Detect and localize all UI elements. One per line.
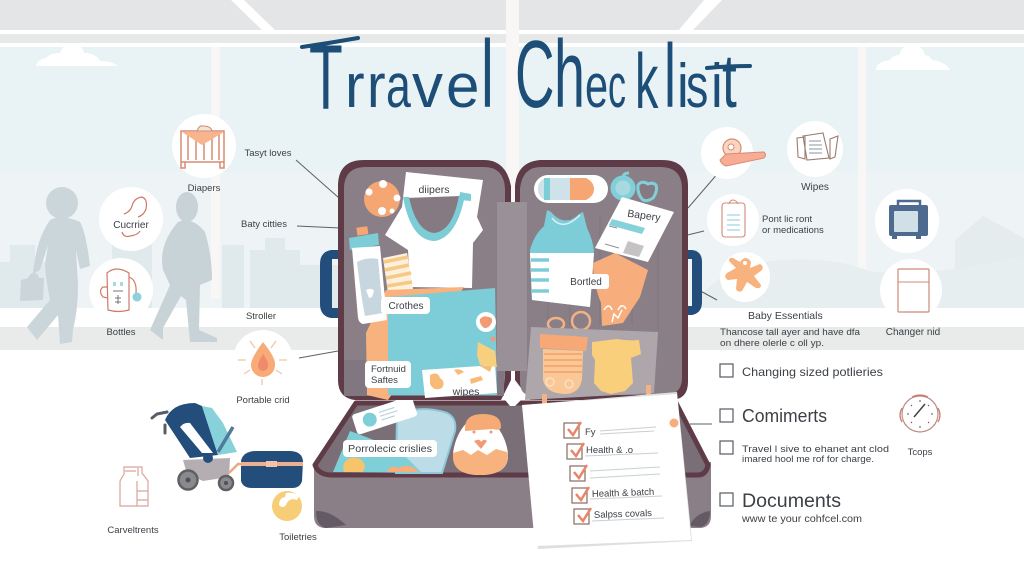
label: Pont licront or medications: or medications (762, 225, 824, 236)
label: Bapery: Bapery (627, 208, 662, 224)
label: Pont licront or medications (762, 214, 824, 236)
label: Toiletries: Toiletries (279, 532, 317, 543)
title: i (711, 52, 723, 120)
icon: clipboard (707, 194, 759, 246)
title: c (608, 52, 626, 120)
icon: roll (701, 127, 766, 179)
checklist: Documents: www te your cohfcel.com (741, 514, 862, 525)
ball (364, 180, 400, 217)
egg toy (453, 414, 508, 475)
label: Fortnuid Saftes (365, 361, 411, 388)
label: Tasyt loves: Tasyt loves (244, 148, 292, 159)
teal tank top (530, 210, 594, 307)
checklist: Comimerts: Comimerts (742, 406, 827, 426)
text: baby essentials description (720, 327, 860, 348)
checklist paper (522, 392, 692, 549)
label: Wipes: Wipes (801, 182, 829, 193)
check item: Health & batch (572, 487, 662, 503)
title: h (554, 21, 585, 128)
title: e (585, 52, 608, 120)
title: r (345, 52, 365, 120)
title: t (722, 39, 737, 124)
clips (542, 385, 651, 408)
label: Fortnuid Saftes: Fortnuid (371, 364, 406, 375)
check item: Salpss covals (574, 508, 664, 524)
icon: cabinet (880, 259, 942, 321)
orange bib (593, 253, 648, 326)
label: Tcops: Tcops (908, 447, 933, 458)
orange cloth (366, 287, 464, 400)
label: Bortled (565, 274, 609, 289)
icon: portable crib drop (233, 330, 293, 390)
checklist: Changing sized potlieries: Changing sized potlieries (742, 365, 883, 379)
icon: navy device (875, 189, 939, 253)
check item: Salpss covals: Salpss covals (594, 508, 652, 521)
label: Stroller: Stroller (246, 311, 276, 322)
label: Crothes: Crothes (388, 301, 424, 312)
label: Carveltrents: Carveltrents (107, 525, 159, 536)
suitcase: lower shell (314, 396, 711, 528)
icon: crib (172, 114, 236, 178)
yellow onesie (592, 339, 641, 394)
icon: open book (787, 121, 843, 177)
silhouette: walking man (150, 192, 217, 342)
label: Bottles: Bottles (106, 327, 136, 338)
label: Baby Essentials: Baby Essentials (748, 310, 823, 322)
label: Crothes (381, 297, 430, 314)
suitcase: right open panel (515, 160, 688, 408)
striped sock (540, 334, 588, 394)
suitcase: left handle (320, 250, 339, 318)
teal blanket (333, 431, 422, 473)
icon: stroller (152, 403, 244, 490)
checklist: Travel note: imared hool me rof for charge. (742, 454, 874, 464)
text: baby essentials description: on dhere olerle c oll yp. (720, 338, 824, 348)
clouds (36, 44, 950, 70)
suitcase: right handle (686, 250, 702, 315)
label: Porrolecic crislies (343, 440, 437, 457)
label: Porrolecic crislies: Porrolecic crislies (348, 444, 432, 455)
title: C (515, 21, 555, 128)
icon: Cucrrier (99, 187, 163, 251)
check item: Fy (564, 422, 656, 438)
suitcase: left open panel (338, 160, 511, 400)
label: Portable crid: Portable crid (236, 395, 290, 406)
title: v (412, 52, 443, 120)
title: l (664, 27, 676, 127)
title: s (686, 52, 708, 120)
icon: lemon toiletry (272, 491, 302, 521)
title: a (386, 52, 411, 120)
white card (595, 197, 674, 262)
label: Changer nid: Changer nid (886, 327, 940, 338)
title flourishes (302, 38, 750, 68)
connector lines (296, 160, 719, 424)
folder badge (476, 312, 496, 342)
text: baby essentials description: Thancose tall ayer and have dfa (720, 327, 860, 337)
wipes pack (422, 342, 497, 398)
center hinge (505, 390, 521, 406)
diaper pack (396, 409, 455, 473)
title (309, 21, 737, 129)
checklist: Travel note: Travel l sive to ehanet ant clod (742, 444, 889, 454)
title: r (367, 52, 386, 120)
checklist: Documents: Documents (742, 491, 841, 512)
label: Baty citties: Baty citties (241, 219, 287, 230)
icon: navy bag (241, 451, 303, 488)
card (351, 396, 418, 435)
center spine (497, 202, 527, 371)
check item: Health & batch: Health & batch (592, 487, 654, 500)
baby bottle (349, 226, 387, 324)
label: wipes: wipes (452, 386, 479, 398)
label: Fortnuid Saftes: Saftes (371, 375, 398, 386)
checklist: Documents (720, 491, 862, 525)
title: i (677, 52, 689, 120)
icon: carton bottle (120, 467, 148, 506)
teal rings (613, 173, 657, 201)
stripes (383, 253, 413, 293)
checklist: Travel note (720, 441, 889, 464)
silhouette: woman with bag (20, 187, 90, 344)
capsule case (534, 175, 608, 203)
check item: blank (570, 465, 660, 481)
title: k (635, 37, 658, 125)
white shirt (385, 172, 483, 288)
check item: Health & .o (567, 443, 658, 459)
label: Pont licront or medications: Pont lic ront (762, 214, 813, 225)
title: e (446, 52, 479, 120)
title: l (481, 21, 494, 128)
icon: Cucrrier: Cucrrier (113, 220, 149, 231)
label: Diapers: Diapers (188, 183, 221, 194)
label: Bortled: Bortled (570, 277, 602, 288)
icon: bottle jug (89, 258, 153, 322)
title: T (309, 27, 343, 129)
check item: Fy: Fy (585, 427, 596, 438)
check item: Health & .o: Health & .o (586, 445, 633, 456)
orange straps (548, 312, 590, 330)
icon: orange plush (720, 252, 770, 302)
label: diipers: diipers (419, 184, 449, 196)
icon: stopwatch (900, 395, 940, 432)
teal folder (388, 288, 497, 395)
gray pocket (525, 327, 658, 400)
